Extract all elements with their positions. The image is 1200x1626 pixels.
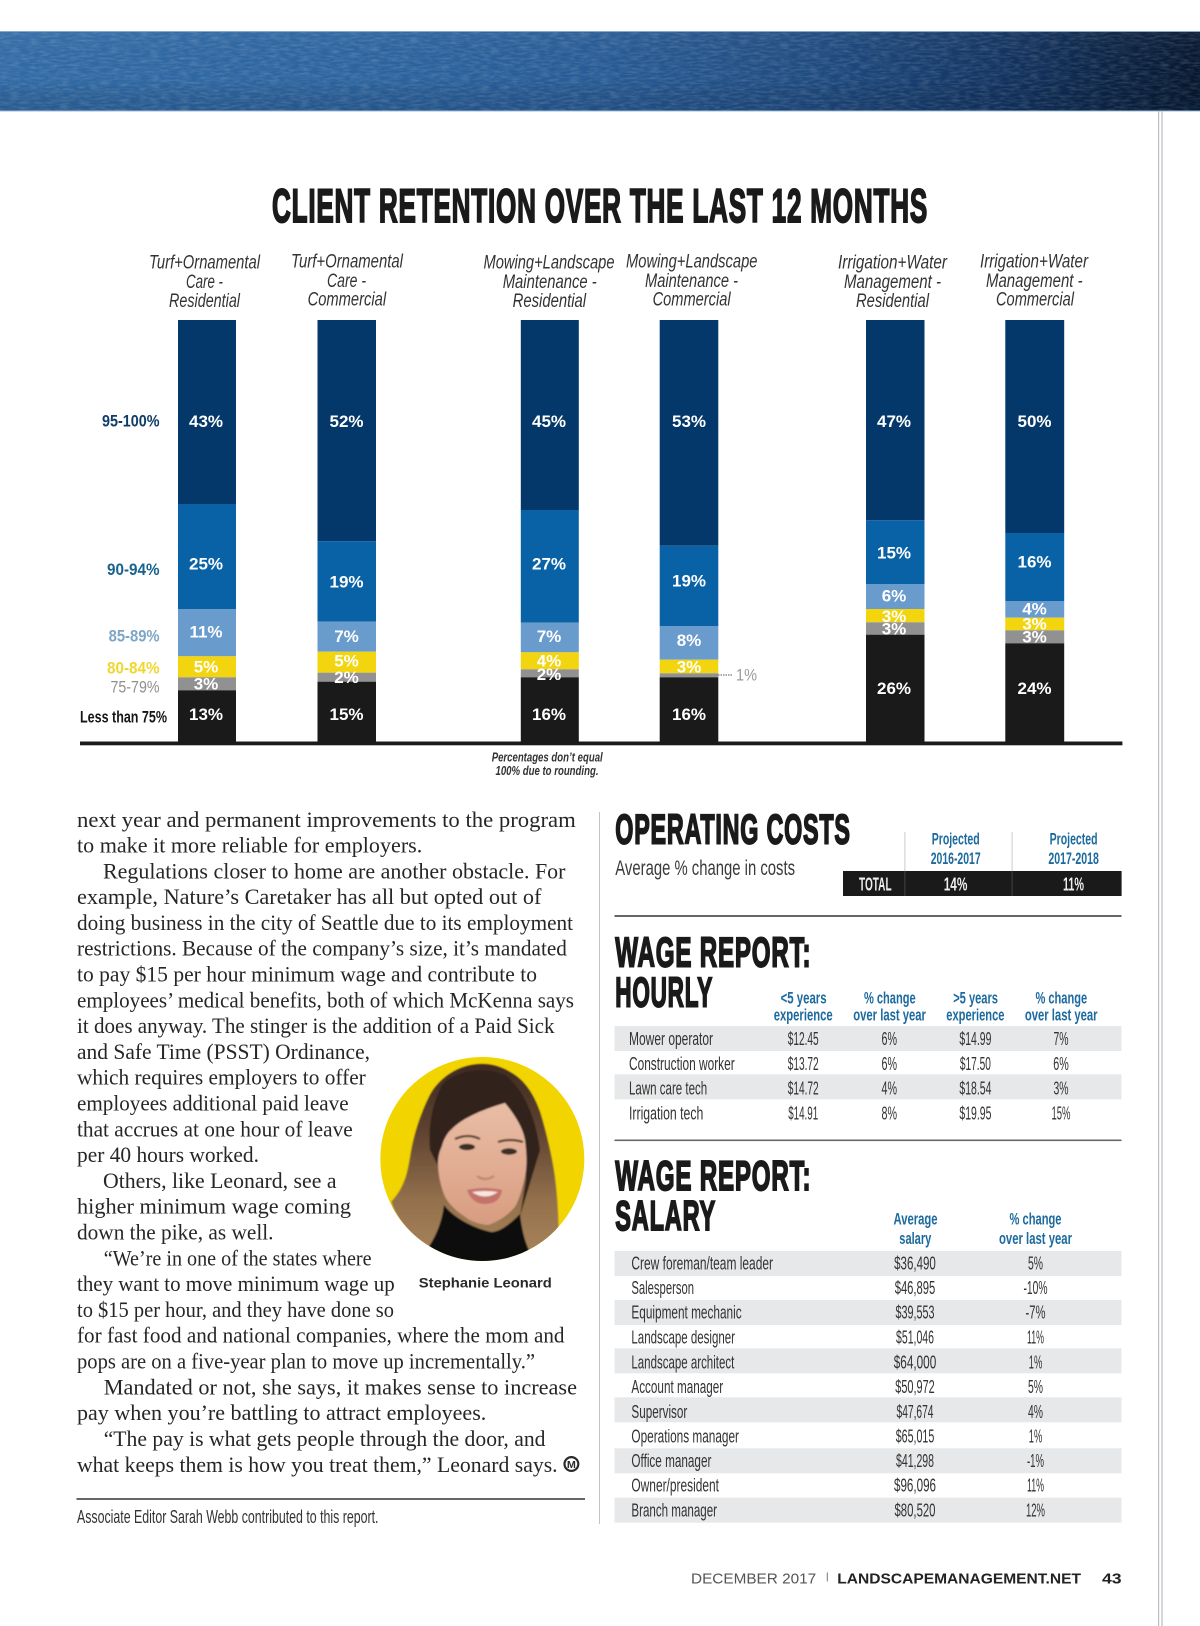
legend labels: Less than 75% (80, 708, 167, 727)
category labels: Care - (186, 272, 223, 293)
callout: 1% (718, 666, 757, 684)
article body text: that accrues at one hour of leave (77, 1116, 353, 1141)
table rows: $50,972 (895, 1377, 935, 1397)
column headers: experience (774, 1006, 833, 1024)
dark inner hair (430, 1070, 540, 1216)
table rows: 6% (882, 1029, 897, 1049)
chart: client retention stacked bars (80, 252, 1122, 745)
bar: mowing residential: 4% (537, 651, 561, 670)
bar: mowing commercial: 19% (672, 571, 706, 590)
bar: turf commercial: 15% (329, 705, 364, 724)
contributor note: Associate Editor Sarah Webb contributed to this report. (77, 1507, 378, 1527)
article body text: which requires employers to offer (77, 1065, 366, 1090)
table rows: $41,298 (896, 1451, 934, 1471)
table rows: 11% (1027, 1476, 1044, 1496)
column headers: >5 years (953, 988, 998, 1008)
table rows: $13.72 (788, 1054, 819, 1074)
table rows: 1% (1029, 1426, 1042, 1446)
bar: mowing commercial (660, 320, 718, 745)
table rows: $36,490 (894, 1254, 936, 1274)
column headers: experience (946, 1006, 1005, 1024)
column headers: salary (899, 1229, 932, 1248)
table rows: 4% (1028, 1402, 1043, 1422)
article body text: “We’re in one of the states where (104, 1245, 372, 1270)
bar: mowing residential (521, 320, 579, 745)
article body text: pay when you’re battling to attract employees. (77, 1400, 486, 1425)
category labels: Mowing+Landscape (484, 252, 614, 274)
portrait caption: Stephanie Leonard (419, 1276, 552, 1290)
category labels: Commercial (308, 290, 387, 310)
table rows: -1% (1027, 1451, 1044, 1471)
total row: 11% (1063, 874, 1084, 894)
table rows: Equipment mechanic (631, 1303, 742, 1323)
heading: WAGE REPORT: (615, 929, 811, 976)
category labels: Commercial (996, 290, 1075, 310)
table rows: 4% (882, 1078, 897, 1098)
table rows: -10% (1024, 1278, 1048, 1298)
article body text: next year and permanent improvements to the program (77, 807, 576, 832)
page footer: 43 (1102, 1570, 1122, 1587)
table rows: $80,520 (894, 1500, 936, 1520)
column headers: 2017-2018 (1048, 849, 1099, 868)
category labels: Residential (169, 291, 241, 312)
table rows: Irrigation tech (629, 1103, 703, 1123)
table rows: 15% (1052, 1103, 1070, 1123)
column headers: Projected (932, 830, 980, 848)
panel: wage report salary (614, 1152, 1122, 1523)
legend labels: 90-94% (107, 560, 160, 579)
chart footnote (492, 750, 603, 778)
face (438, 1103, 526, 1225)
article body text: example, Nature’s Caretaker has all but opted out of (77, 884, 542, 909)
bar: turf residential: 5% (194, 658, 218, 677)
mouth (467, 1188, 502, 1204)
category labels (149, 252, 1089, 312)
heading: SALARY (615, 1192, 716, 1239)
column headers: % change (1035, 988, 1087, 1008)
column headers: Average (894, 1210, 938, 1228)
table rows: $96,096 (894, 1476, 936, 1496)
article body text: restrictions. Because of the company’s size, it’s mandated (77, 936, 567, 961)
column headers (774, 988, 1098, 1024)
column headers: % change (1010, 1210, 1062, 1228)
article body text: Mandated or not, she says, it makes sense to increase (104, 1374, 577, 1399)
column headers (894, 1210, 1072, 1248)
category labels: Commercial (653, 290, 731, 310)
column headers: over last year (1025, 1006, 1098, 1024)
column headers: over last year (853, 1006, 926, 1024)
black turtleneck (428, 1205, 530, 1261)
column headers: % change (864, 988, 916, 1008)
hair (392, 1064, 558, 1258)
table rows: $14.91 (788, 1103, 818, 1123)
bar: irrigation commercial: 3% (1022, 628, 1047, 647)
bar: turf commercial (318, 320, 376, 745)
article body text: per 40 hours worked. (77, 1142, 259, 1167)
table rows: Account manager (631, 1377, 723, 1397)
bar: turf residential: 13% (189, 705, 223, 724)
article body text: for fast food and national companies, where the mom and (77, 1323, 564, 1348)
article body text: it does anyway. The stinger is the addition of a Paid Sick (77, 1013, 555, 1038)
legend labels: 85-89% (109, 627, 160, 646)
total row: TOTAL (859, 874, 892, 894)
legend labels: 80-84% (107, 659, 160, 678)
table rows (614, 1251, 1122, 1523)
bar: turf residential: 3% (194, 675, 218, 694)
heading (615, 929, 811, 1016)
table rows: Salesperson (631, 1278, 694, 1298)
heading: OPERATING COSTS (615, 806, 851, 852)
icon: end mark LM (563, 1456, 579, 1472)
table rows (614, 1026, 1122, 1123)
article body text: doing business in the city of Seattle due to its employment (77, 910, 574, 935)
bar: turf residential: 43% (189, 412, 223, 431)
panel: wage report hourly (614, 929, 1122, 1123)
category labels: Irrigation+Water (838, 252, 948, 274)
category labels: Residential (856, 291, 930, 312)
article body text: to pay $15 per hour minimum wage and contribute to (77, 962, 537, 986)
callout: 1%: 1% (736, 666, 757, 684)
table rows: $19.95 (959, 1103, 991, 1123)
column headers: 2016-2017 (931, 849, 981, 868)
table rows: 6% (882, 1054, 897, 1074)
bar: irrigation residential: 3% (882, 607, 906, 626)
bar: mowing residential: 16% (532, 705, 566, 724)
table rows: $46,895 (895, 1278, 935, 1298)
bar: turf commercial: 2% (334, 668, 359, 687)
article body text (77, 807, 577, 1477)
bar: irrigation residential: 47% (877, 412, 911, 431)
category labels: Maintenance - (503, 272, 597, 293)
table rows: $18.54 (959, 1078, 991, 1098)
article body text: they want to move minimum wage up (77, 1271, 395, 1296)
table rows: 6% (1053, 1054, 1069, 1074)
table rows: 8% (882, 1103, 897, 1123)
bar: mowing commercial: 16% (672, 705, 706, 724)
bar: irrigation residential (866, 320, 924, 745)
heading: HOURLY (615, 969, 713, 1016)
eyes and brows (459, 1144, 475, 1150)
category labels: Management - (844, 272, 941, 293)
bar: irrigation commercial: 4% (1022, 599, 1047, 618)
article body text: to make it more reliable for employers. (77, 832, 422, 858)
category labels: Maintenance - (645, 271, 738, 292)
article body text: down the pike, as well. (77, 1220, 274, 1244)
table rows: 3% (1054, 1078, 1068, 1098)
legend labels (80, 412, 167, 727)
article body text: and Safe Time (PSST) Ordinance, (77, 1039, 370, 1064)
bar: turf residential: 11% (189, 622, 223, 641)
table rows: $65,015 (896, 1426, 934, 1446)
bar: irrigation residential: 3% (882, 620, 906, 639)
total row (843, 871, 1122, 896)
article body text: what keeps them is how you treat them,” Leonard says. (77, 1452, 558, 1477)
table rows: 7% (1054, 1029, 1068, 1049)
category labels: Turf+Ornamental (291, 252, 404, 272)
bar: irrigation residential: 15% (877, 543, 911, 562)
column divider (599, 812, 600, 1524)
article body text: higher minimum wage coming (77, 1194, 351, 1219)
article body text: employees additional paid leave (77, 1090, 349, 1116)
bar: mowing commercial: 3% (677, 658, 701, 677)
table rows: Operations manager (631, 1426, 739, 1446)
legend labels: 75-79% (110, 677, 160, 696)
article body text: to $15 per hour, and they have done so (77, 1297, 394, 1322)
bar: mowing residential: 27% (532, 554, 566, 573)
panel: operating costs (615, 806, 1122, 896)
table rows: Branch manager (631, 1500, 717, 1520)
table rows: $14.99 (959, 1029, 991, 1049)
category labels: Mowing+Landscape (626, 252, 758, 272)
bar: turf residential: 25% (189, 554, 223, 573)
bar: mowing residential: 7% (537, 627, 561, 646)
table rows: $47,674 (896, 1402, 934, 1422)
table rows: $51,046 (896, 1328, 934, 1348)
portrait: Stephanie Leonard (380, 1057, 584, 1266)
table rows: 5% (1028, 1254, 1043, 1274)
table rows: Crew foreman/team leader (631, 1254, 773, 1274)
icon: end mark LM: M (567, 1460, 576, 1471)
page edge double rule (1158, 111, 1163, 1626)
table rows: $39,553 (896, 1303, 934, 1323)
table rows: $14.72 (788, 1078, 819, 1098)
bar: irrigation residential: 26% (877, 679, 911, 698)
category labels: Management - (986, 271, 1083, 292)
chart baseline (80, 742, 1122, 745)
column headers: Projected (1050, 830, 1098, 848)
category labels: Turf+Ornamental (149, 252, 261, 274)
table rows: Office manager (631, 1451, 711, 1471)
category labels: Irrigation+Water (980, 252, 1089, 272)
bar: mowing residential: 2% (537, 665, 561, 684)
bar: mowing commercial: 8% (677, 631, 701, 650)
page footer (691, 1570, 1122, 1587)
bar: turf commercial: 7% (334, 627, 359, 646)
table rows: Mower operator (629, 1029, 713, 1049)
category labels: Residential (513, 291, 587, 312)
table rows: Landscape architect (631, 1352, 734, 1372)
bar: irrigation commercial: 16% (1017, 553, 1052, 572)
chart footnote: 100% due to rounding. (496, 763, 598, 778)
category labels: Care - (327, 271, 366, 292)
table rows: Lawn care tech (629, 1078, 707, 1098)
table rows: Supervisor (631, 1402, 687, 1422)
chart footnote: Percentages don’t equal (492, 750, 603, 765)
bar: mowing commercial: 53% (672, 412, 706, 431)
total row: 14% (944, 874, 967, 894)
nose (477, 1176, 494, 1179)
bar: turf commercial: 19% (329, 573, 364, 592)
table rows: 12% (1026, 1500, 1045, 1520)
article body text: Regulations closer to home are another obstacle. For (103, 858, 566, 883)
legend labels: 95-100% (102, 412, 160, 431)
article body text: employees’ medical benefits, both of which McKenna says (77, 987, 574, 1012)
table rows: -7% (1026, 1303, 1046, 1323)
table rows: $64,000 (894, 1352, 936, 1372)
header banner (0, 31, 1200, 112)
subheading: Average % change in costs (615, 857, 795, 880)
column headers (904, 830, 1099, 871)
table rows: Owner/president (631, 1476, 719, 1496)
bar: turf residential (178, 320, 236, 745)
column headers: over last year (999, 1229, 1072, 1248)
table rows: Construction worker (629, 1054, 735, 1074)
article body text: pops are on a five-year plan to move up incrementally.” (77, 1348, 535, 1374)
column headers: <5 years (781, 988, 827, 1008)
table rows: 5% (1028, 1377, 1043, 1397)
heading: WAGE REPORT: (615, 1152, 811, 1199)
bar: irrigation residential: 6% (882, 587, 906, 606)
table rows: $17.50 (960, 1054, 991, 1074)
table rows: 11% (1027, 1328, 1044, 1348)
bar: irrigation commercial: 50% (1017, 412, 1052, 431)
heading (615, 1152, 811, 1239)
bar: turf commercial: 5% (334, 651, 359, 670)
page footer: DECEMBER 2017 (691, 1570, 816, 1587)
article body text: “The pay is what gets people through the door, and (104, 1426, 545, 1451)
bar: mowing residential: 45% (532, 412, 566, 431)
table rows: 1% (1029, 1352, 1042, 1372)
bar: irrigation commercial (1005, 320, 1064, 745)
table rows: Landscape designer (631, 1328, 735, 1348)
table rows: $12.45 (788, 1029, 819, 1049)
article body text: Others, like Leonard, see a (103, 1168, 337, 1193)
page footer: LANDSCAPEMANAGEMENT.NET (837, 1570, 1081, 1587)
bar: turf commercial: 52% (329, 412, 364, 431)
bar: irrigation commercial: 3% (1022, 614, 1047, 633)
bar: irrigation commercial: 24% (1017, 679, 1052, 698)
